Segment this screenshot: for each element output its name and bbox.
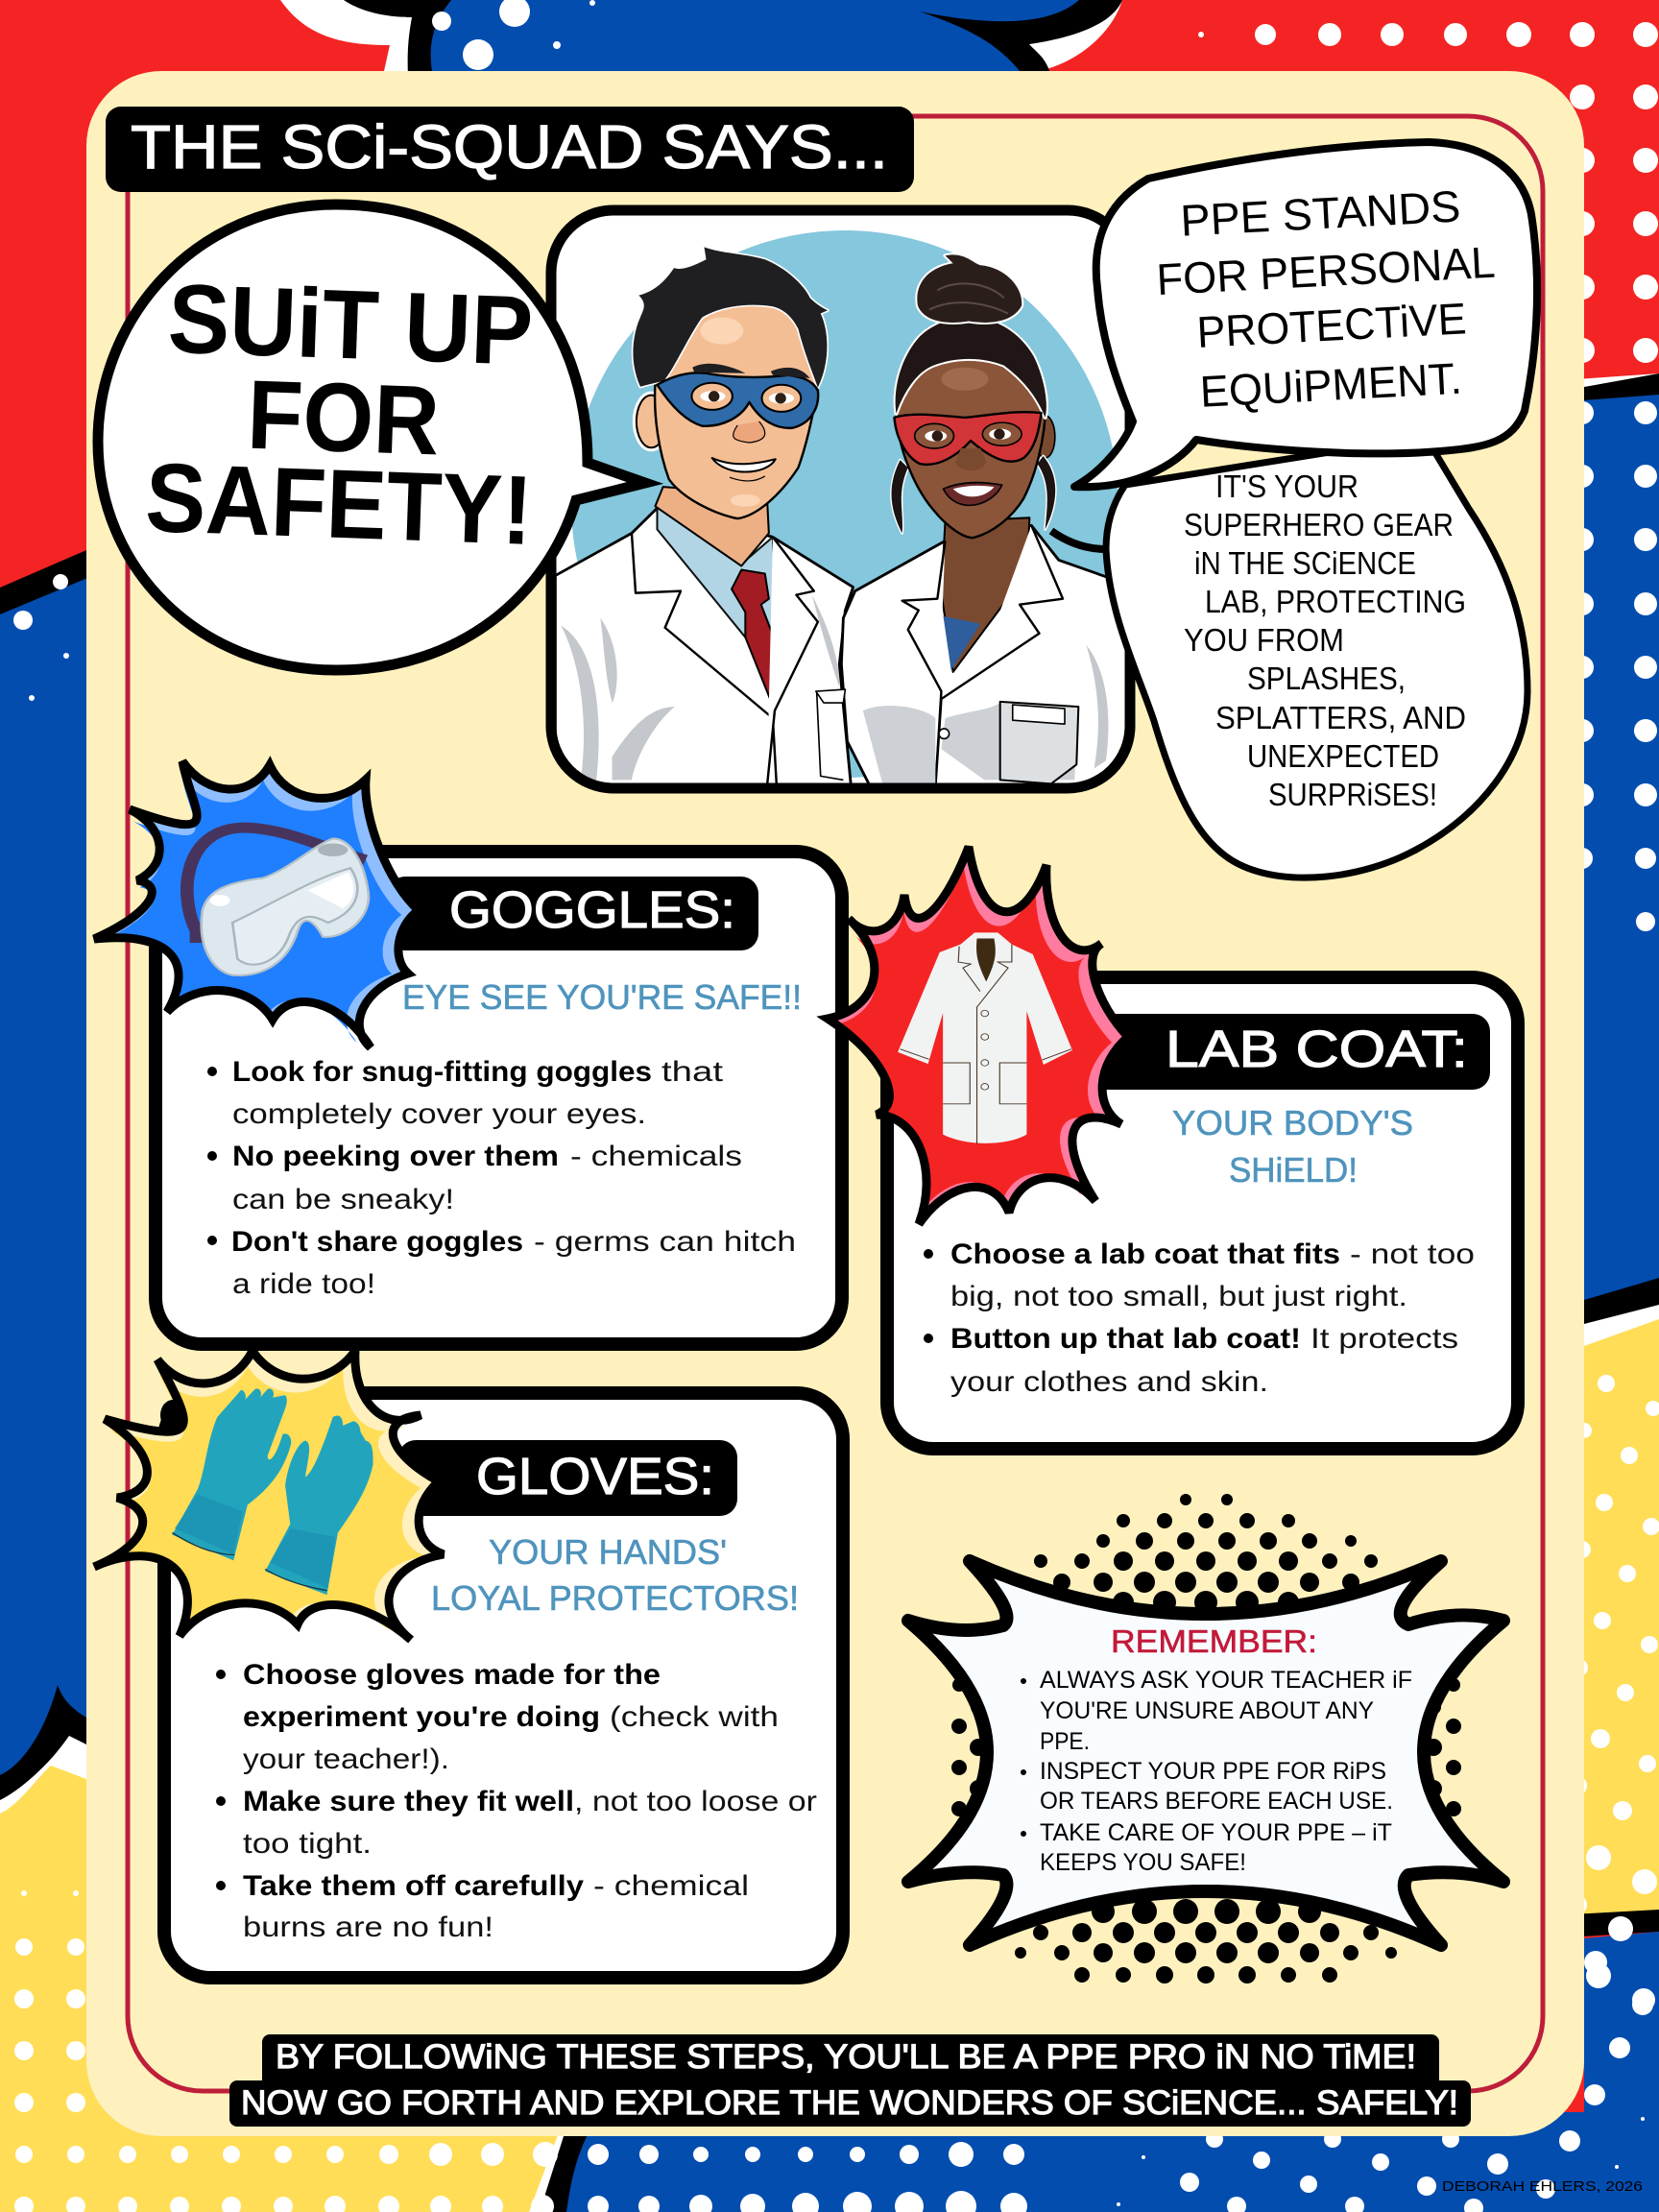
speech bubble: superhero gear explanation: iN THE SCiENCE: [1194, 545, 1416, 581]
gloves bullet list: Make sure they fit well: [243, 1786, 574, 1817]
lab coat heading bar: [1085, 1014, 1490, 1090]
lab coat panel box: [887, 977, 1518, 1449]
gloves burst badge: [94, 1351, 444, 1640]
gloves bullet list: your teacher!).: [243, 1743, 449, 1775]
icon: rubber gloves: [172, 1388, 373, 1595]
goggles bullet list: Look for snug-fitting goggles: [232, 1056, 652, 1088]
footer banner: BY FOLLOWiNG THESE STEPS, YOU'LL BE A PPE PRO iN NO TiME!: [276, 2038, 1416, 2076]
gloves bullet list: (check with: [610, 1701, 779, 1733]
speech bubble: superhero gear explanation: [1051, 437, 1527, 878]
speech bubble: PPE stands for personal protective equipment: FOR PERSONAL: [1155, 237, 1497, 304]
speech bubble: superhero gear explanation: SUPERHERO GEAR: [1184, 507, 1454, 542]
goggles bullet list: a ride too!: [232, 1268, 375, 1300]
speech bubble: superhero gear explanation: IT'S YOUR: [1215, 469, 1358, 504]
goggles bullet list: - chemicals: [570, 1141, 742, 1172]
speech bubble: suit up for safety: SAFETY!: [144, 443, 534, 565]
lab coat bullet list: [924, 1238, 1475, 1398]
red inner border: [128, 116, 1543, 2091]
goggles panel box: [156, 852, 842, 1344]
gloves bullet list: experiment you're doing: [243, 1701, 600, 1733]
scientist: woman: [816, 254, 1129, 787]
goggles bullet list: Don't share goggles: [231, 1226, 523, 1258]
icon: safety goggles: [187, 828, 369, 975]
goggles bullet list: No peeking over them: [232, 1141, 559, 1172]
goggles heading bar: GOGGLES:: [449, 881, 735, 939]
remember bullet list: YOU'RE UNSURE ABOUT ANY: [1040, 1697, 1374, 1724]
gloves panel box: [164, 1393, 843, 1978]
speech bubble: superhero gear explanation: UNEXPECTED: [1247, 738, 1439, 774]
remember bullet list: ALWAYS ASK YOUR TEACHER iF: [1040, 1667, 1412, 1694]
goggles burst badge: [94, 761, 419, 1047]
illustration: two scientists in masks: [546, 210, 1130, 788]
goggles bullet list: completely cover your eyes.: [232, 1098, 646, 1130]
scientist: man: [555, 247, 854, 787]
lab coat bullet list: - not too: [1350, 1238, 1475, 1270]
gloves tagline: LOYAL PROTECTORS!: [431, 1578, 799, 1618]
remember bullet list: [1021, 1667, 1412, 1876]
lab coat bullet list: It protects: [1310, 1323, 1458, 1355]
panel: lab coat: [828, 847, 1518, 1449]
speech bubble: superhero gear explanation: SPLASHES,: [1247, 661, 1406, 696]
panel: gloves: [94, 1351, 843, 1978]
remember bullet list: KEEPS YOU SAFE!: [1040, 1849, 1246, 1876]
goggles tagline: EYE SEE YOU'RE SAFE!!: [402, 977, 802, 1017]
lab coat burst badge: [828, 847, 1128, 1224]
remember bullet list: TAKE CARE OF YOUR PPE – iT: [1040, 1819, 1392, 1846]
speech bubble: PPE stands for personal protective equipment: [1074, 142, 1537, 487]
gloves bullet list: , not too loose or: [574, 1786, 817, 1817]
gloves bullet list: Choose gloves made for the: [243, 1659, 661, 1691]
speech bubble: PPE stands for personal protective equipment: PROTECTiVE: [1195, 293, 1468, 357]
footer banner: NOW GO FORTH AND EXPLORE THE WONDERS OF SCiENCE... SAFELY!: [241, 2084, 1458, 2122]
panel: goggles: [94, 761, 842, 1344]
footer banner: [229, 2034, 1471, 2127]
lab coat tagline: [1172, 1103, 1413, 1190]
gloves bullet list: too tight.: [243, 1828, 372, 1860]
remember heading: REMEMBER:: [1111, 1623, 1317, 1659]
gloves bullet list: Take them off carefully: [243, 1870, 584, 1902]
lab coat heading bar: LAB COAT:: [1166, 1021, 1468, 1078]
gloves tagline: YOUR HANDS': [489, 1532, 727, 1572]
goggles bullet list: - germs can hitch: [534, 1226, 796, 1258]
lab coat bullet list: Choose a lab coat that fits: [950, 1238, 1340, 1270]
speech bubble: suit up for safety: [98, 204, 645, 670]
lab coat bullet list: Button up that lab coat!: [950, 1323, 1301, 1355]
remember bullet list: OR TEARS BEFORE EACH USE.: [1040, 1788, 1393, 1815]
gloves bullet list: burns are no fun!: [243, 1911, 493, 1943]
gloves heading bar: [398, 1440, 737, 1516]
lab coat bullet list: big, not too small, but just right.: [950, 1281, 1407, 1312]
speech bubble: suit up for safety: SUiT UP: [166, 264, 535, 386]
callout: remember: [908, 1494, 1503, 1984]
lab coat bullet list: your clothes and skin.: [950, 1366, 1268, 1398]
speech bubble: PPE stands for personal protective equipment: PPE STANDS: [1179, 180, 1462, 246]
goggles bullet list: [207, 1056, 796, 1300]
gloves tagline: [431, 1532, 799, 1618]
lab coat tagline: SHiELD!: [1229, 1150, 1358, 1190]
credit: DEBORAH EHLERS, 2026: [1442, 2178, 1643, 2195]
goggles bullet list: that: [661, 1056, 724, 1088]
speech bubble: superhero gear explanation: YOU FROM: [1184, 622, 1344, 658]
goggles heading bar: [388, 877, 758, 950]
speech bubble: suit up for safety: FOR: [246, 360, 442, 475]
goggles bullet list: can be sneaky!: [232, 1184, 454, 1215]
burst shape: [908, 1561, 1503, 1945]
remember bullet list: INSPECT YOUR PPE FOR RiPS: [1040, 1758, 1386, 1785]
title bar: THE SCi-SQUAD SAYS...: [131, 112, 888, 181]
speech bubble: superhero gear explanation: LAB, PROTECTING: [1205, 584, 1466, 619]
speech bubble: superhero gear explanation: SURPRiSES!: [1268, 777, 1437, 812]
halftone dots: [951, 1494, 1461, 1984]
speech bubble: superhero gear explanation: SPLATTERS, AND: [1215, 700, 1466, 735]
icon: lab coat: [898, 932, 1072, 1144]
remember bullet list: PPE.: [1040, 1728, 1090, 1755]
speech bubble: PPE stands for personal protective equipment: EQUiPMENT.: [1199, 353, 1463, 417]
gloves heading bar: GLOVES:: [476, 1448, 714, 1505]
gloves bullet list: [216, 1659, 817, 1943]
lab coat tagline: YOUR BODY'S: [1172, 1103, 1413, 1142]
gloves bullet list: - chemical: [593, 1870, 749, 1902]
blue circle backdrop: [571, 230, 1118, 778]
